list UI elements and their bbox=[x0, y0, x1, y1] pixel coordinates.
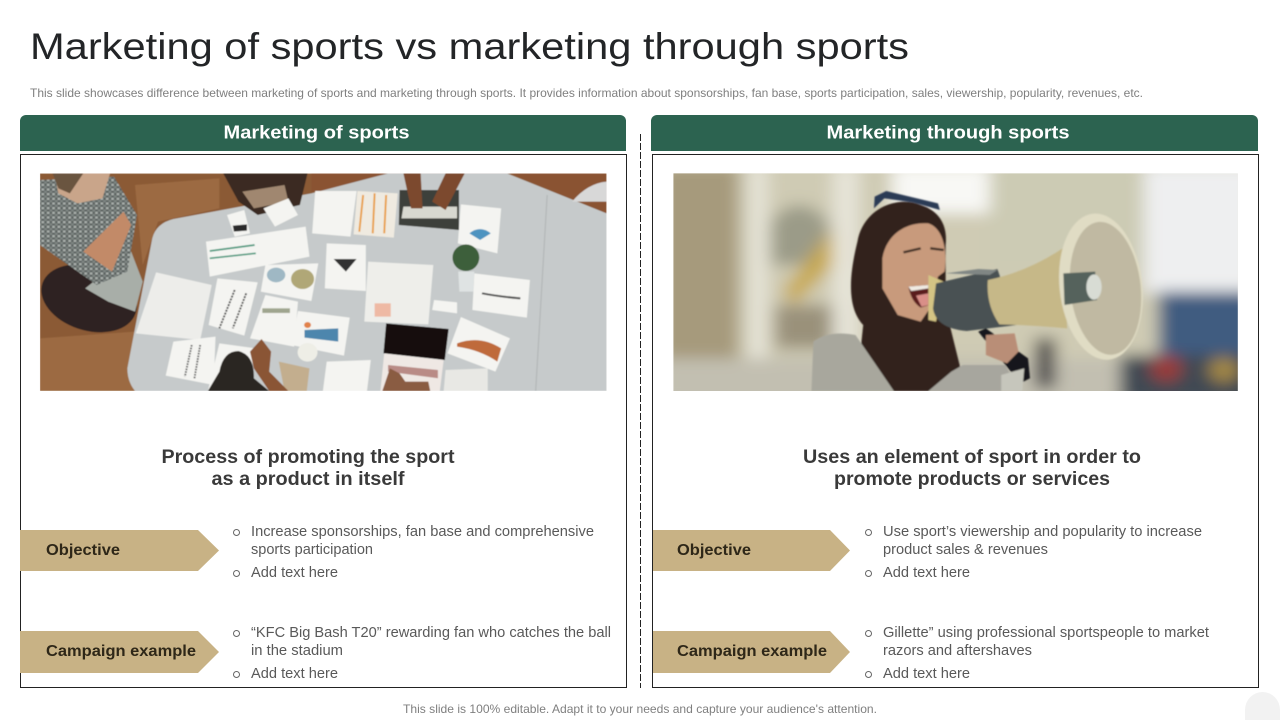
photo: woman shouting into megaphone bbox=[673, 173, 1238, 391]
description: marketing through sports bbox=[803, 447, 1141, 490]
header: marketing through sports bbox=[651, 115, 1258, 151]
description: marketing through sports: promote products or services bbox=[834, 469, 1110, 490]
description: marketing of sports: as a product in itself bbox=[212, 469, 405, 490]
label: objective: Objective bbox=[46, 542, 120, 559]
bullets: campaign example: in the stadium bbox=[251, 642, 343, 659]
label: campaign example bbox=[20, 631, 219, 673]
bullets: objective: Increase sponsorships, fan base and comprehensive bbox=[251, 523, 594, 540]
panel: marketing through sports bbox=[651, 115, 1259, 688]
bullets: objective bbox=[866, 523, 1202, 581]
bullets: objective bbox=[234, 523, 594, 581]
title: Marketing of sports vs marketing through sports bbox=[30, 26, 909, 67]
header: marketing of sports: Marketing of sports bbox=[224, 122, 410, 142]
description: marketing of sports: Process of promoting the sport bbox=[162, 447, 455, 468]
label: campaign example: Campaign example bbox=[46, 643, 196, 660]
bullets: objective: product sales & revenues bbox=[883, 541, 1048, 558]
bullets: campaign example: “KFC Big Bash T20” rewarding fan who catches the ball bbox=[251, 624, 611, 641]
bullets: objective: Add text here bbox=[883, 564, 970, 581]
header: marketing through sports: Marketing through sports bbox=[826, 122, 1070, 142]
label: campaign example: Campaign example bbox=[677, 643, 827, 660]
subtitle: This slide showcases difference between marketing of sports and marketing through sports. It provides information about sponsorships, fan base, sports participation, sales, viewership, popularity, revenues, etc. bbox=[30, 86, 1143, 100]
panel: marketing of sports bbox=[20, 115, 626, 688]
footer note: This slide is 100% editable. Adapt it to your needs and capture your audience's attention. bbox=[403, 702, 877, 716]
bullets: objective: Use sport’s viewership and popularity to increase bbox=[883, 523, 1202, 540]
bullets: campaign example: Add text here bbox=[251, 665, 338, 682]
label: campaign example bbox=[653, 631, 850, 673]
photo: team at table with charts bbox=[28, 173, 607, 391]
bullets: campaign example bbox=[234, 624, 611, 682]
label: objective bbox=[20, 530, 219, 571]
panel border bbox=[652, 154, 1258, 688]
panel border bbox=[20, 154, 626, 688]
bullets: objective: sports participation bbox=[251, 541, 373, 558]
bullets: campaign example: Gillette” using professional sportspeople to market bbox=[883, 624, 1210, 641]
label: objective bbox=[653, 530, 850, 571]
label: objective: Objective bbox=[677, 542, 751, 559]
description: marketing of sports bbox=[162, 447, 455, 490]
bullets: objective: Add text here bbox=[251, 564, 338, 581]
dashed divider bbox=[640, 134, 642, 688]
corner badge bbox=[1245, 692, 1280, 720]
bullets: campaign example: Add text here bbox=[883, 665, 970, 682]
bullets: campaign example bbox=[866, 624, 1210, 682]
bullets: campaign example: razors and aftershaves bbox=[883, 642, 1032, 659]
header: marketing of sports bbox=[20, 115, 626, 151]
description: marketing through sports: Uses an element of sport in order to bbox=[803, 447, 1141, 468]
